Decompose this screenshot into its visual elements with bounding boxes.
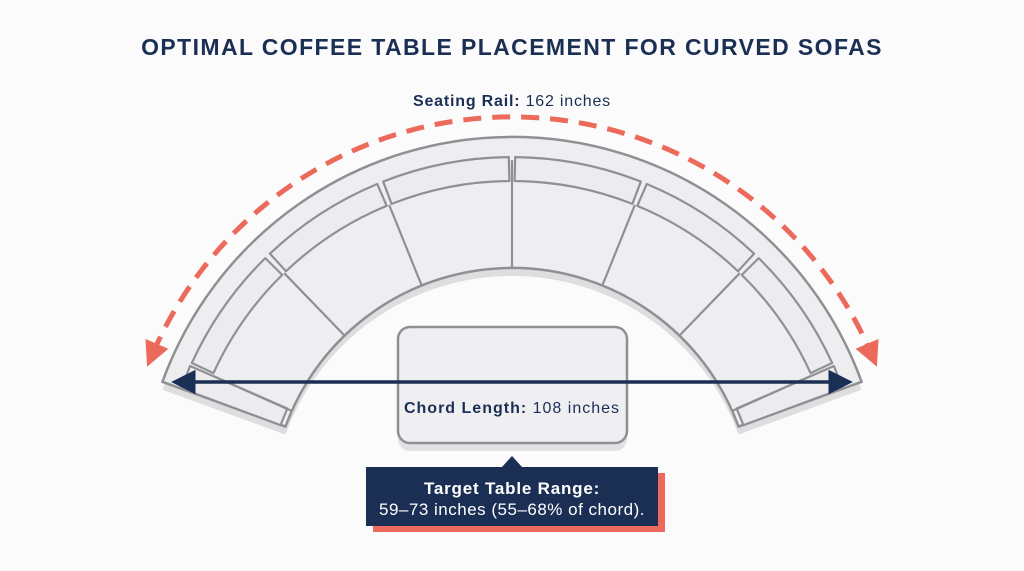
seating rail label: Seating Rail: 162 inches bbox=[413, 93, 611, 110]
arrow: seating rail dashed arc bbox=[153, 117, 871, 353]
chord label: Chord Length: 108 inches bbox=[404, 400, 620, 417]
arrow: chord length bbox=[176, 380, 848, 384]
sofa bbox=[162, 137, 862, 435]
callout: target table range: Target Table Range: bbox=[424, 479, 600, 498]
title: OPTIMAL COFFEE TABLE PLACEMENT FOR CURVED SOFAS bbox=[141, 34, 883, 60]
callout: target table range bbox=[366, 456, 665, 532]
callout: target table range: 59–73 inches (55–68% of chord). bbox=[379, 500, 645, 519]
coffee table bbox=[398, 327, 627, 451]
